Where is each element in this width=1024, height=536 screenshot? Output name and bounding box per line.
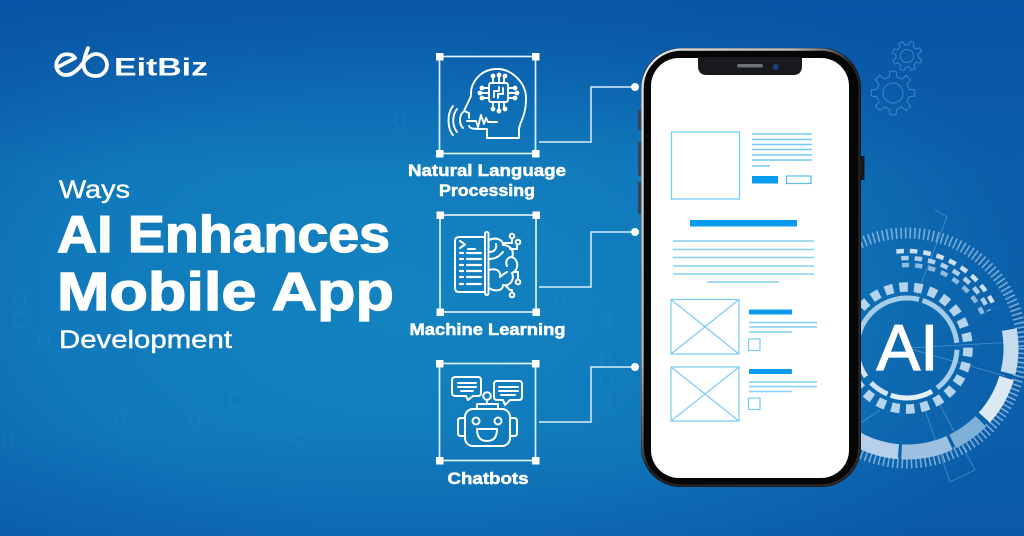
title block xyxy=(57,176,394,354)
selection frame xyxy=(436,360,540,464)
connector xyxy=(539,87,635,142)
phone bezel highlight xyxy=(642,50,860,486)
wireframe: list item 1 xyxy=(671,300,817,354)
connector xyxy=(539,232,635,287)
title line: Development: Development xyxy=(59,326,232,354)
side buttons xyxy=(638,110,864,214)
outer arc segments xyxy=(760,201,1024,495)
phone xyxy=(638,48,864,487)
connector xyxy=(539,367,635,422)
icon: gears xyxy=(871,37,926,115)
icon: eb mark xyxy=(56,48,107,76)
notch xyxy=(698,57,802,75)
speaker xyxy=(737,64,763,68)
connector dot xyxy=(631,228,639,236)
logo xyxy=(56,48,208,82)
connector dot xyxy=(631,83,639,91)
wireframe: top image xyxy=(672,132,740,199)
camera xyxy=(772,64,778,70)
faint frame lines xyxy=(850,210,1015,482)
screen xyxy=(651,58,849,478)
panel: machine learning xyxy=(410,212,639,339)
AI hud circle xyxy=(859,210,1024,482)
inner ring segments xyxy=(837,278,977,418)
wireframe: list item 2 xyxy=(671,367,817,421)
AI text: AI xyxy=(876,311,938,384)
wireframe: text lines xyxy=(752,134,812,166)
selection frame xyxy=(436,53,540,158)
label: Natural Language xyxy=(408,162,566,180)
panel: natural language processing xyxy=(408,53,639,200)
logo wordmark: EitBiz xyxy=(114,54,208,82)
title line: AI Enhances: AI Enhances xyxy=(57,206,390,264)
icon: code and brain xyxy=(455,232,520,297)
label line 2: Processing xyxy=(439,182,535,200)
square ring xyxy=(846,287,968,409)
icon: robot with speech bubbles xyxy=(452,377,522,446)
dot rings xyxy=(896,248,998,314)
wireframe: secondary button xyxy=(786,176,811,184)
wireframe: primary button xyxy=(752,176,778,184)
title line: Mobile App: Mobile App xyxy=(57,262,394,322)
panel: chatbots xyxy=(436,360,639,488)
connector dot xyxy=(631,363,639,371)
title line: Ways: Ways xyxy=(59,176,130,204)
label: Chatbots xyxy=(448,470,528,488)
wireframe: paragraph xyxy=(673,241,814,282)
wireframe: heading bar xyxy=(690,220,797,226)
icon: AI head speaking xyxy=(448,69,526,138)
phone body xyxy=(641,48,861,487)
outer tick ring xyxy=(792,233,1022,463)
label: Machine Learning xyxy=(410,321,566,339)
selection frame xyxy=(436,212,540,316)
